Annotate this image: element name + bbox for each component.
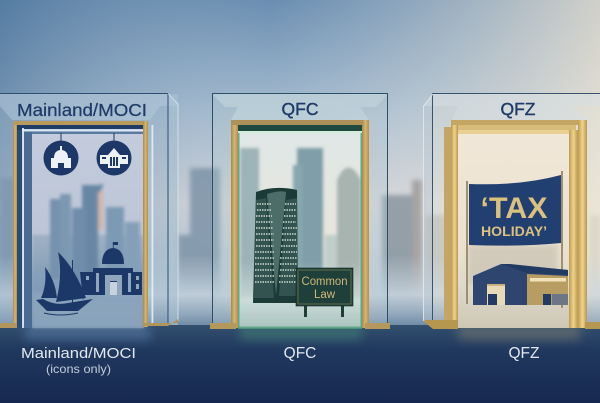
gold door frame — [210, 120, 390, 329]
interior skyline — [32, 184, 144, 328]
icon: domed building badge — [44, 133, 78, 176]
sign: Common Law — [296, 268, 353, 317]
caption: Mainland/MOCI (icons only): Mainland/MOCI — [21, 345, 136, 362]
icon: warehouse — [473, 264, 568, 305]
icon: government palace — [80, 242, 142, 300]
sign: Common Law: Law — [314, 289, 336, 301]
glass enclosure — [423, 94, 600, 325]
door interior — [239, 133, 362, 328]
door interior — [32, 134, 144, 328]
interior haze skyline — [468, 245, 558, 285]
glass enclosure — [0, 94, 178, 325]
panel: QFZ — [423, 94, 600, 362]
caption: Mainland/MOCI (icons only) — [21, 345, 136, 376]
caption: QFC: QFC — [284, 345, 316, 362]
interior mist — [239, 262, 362, 328]
heading: QFC: QFC — [282, 99, 318, 119]
flag: TAX HOLIDAY: HOLIDAY’ — [481, 223, 547, 239]
caption: Mainland/MOCI (icons only): (icons only) — [46, 362, 111, 376]
icon: civic building badge — [96, 133, 132, 176]
panel: Mainland/MOCI — [0, 94, 178, 376]
glass enclosure — [212, 94, 388, 324]
flag: TAX HOLIDAY: ‘TAX — [480, 192, 548, 225]
interior skyline — [240, 148, 361, 298]
flag: TAX HOLIDAY — [466, 171, 563, 308]
icon: office tower — [253, 188, 298, 303]
panel: QFC — [210, 94, 390, 362]
floor — [0, 325, 600, 403]
heading: QFZ: QFZ — [500, 99, 536, 119]
icon: dhow boat — [36, 252, 93, 315]
gold door frame — [0, 121, 178, 328]
blurred background skyline — [0, 168, 600, 310]
sign: Common Law: Common — [302, 276, 348, 288]
gold door frame — [423, 120, 600, 329]
heading: Mainland/MOCI: Mainland/MOCI — [17, 100, 147, 120]
horizon haze — [0, 255, 600, 327]
door interior — [458, 134, 569, 328]
glowing light strips — [22, 125, 153, 328]
caption: QFZ: QFZ — [508, 345, 540, 362]
